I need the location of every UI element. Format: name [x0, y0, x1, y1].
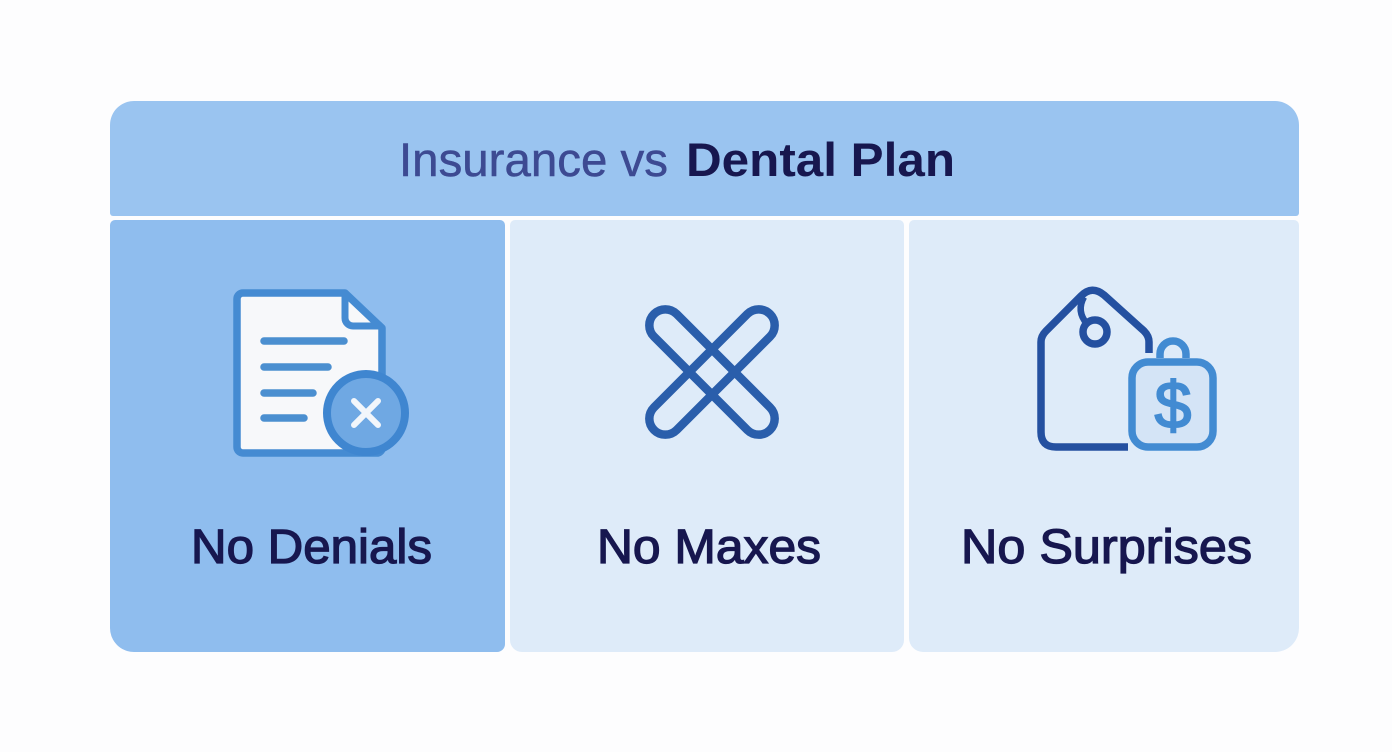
panel: no maxes: [510, 220, 904, 652]
icon: crossed capsules: [643, 303, 781, 441]
label: no surprises: No Surprises: [961, 521, 1252, 574]
icon: price tag with dollar bag: $: [1155, 368, 1191, 442]
label: no denials: No Denials: [191, 521, 432, 574]
title: [399, 133, 955, 186]
header panel: [110, 101, 1299, 216]
title: Insurance vs: [399, 133, 668, 186]
label: no maxes: No Maxes: [597, 521, 821, 574]
panel: no surprises: [909, 220, 1299, 652]
icon: document with x: [237, 293, 405, 453]
icon: price tag with dollar bag: [1041, 290, 1213, 447]
title: Dental Plan: [686, 133, 955, 186]
panel: no denials: [110, 220, 505, 652]
